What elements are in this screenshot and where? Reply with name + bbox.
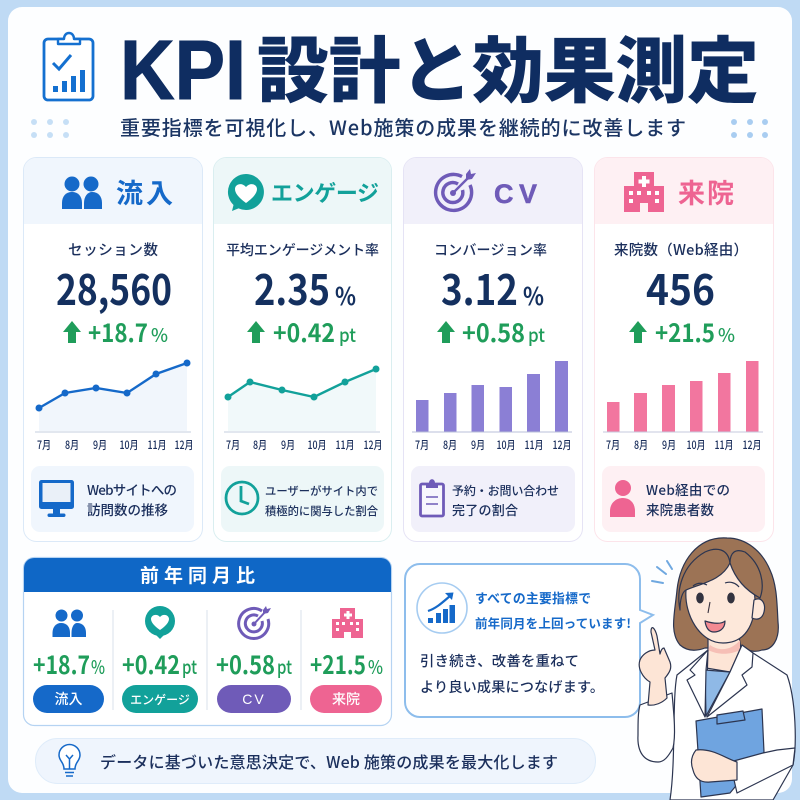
callout: speech bubble <box>405 564 653 717</box>
line chart: 11月 <box>148 437 166 453</box>
metric label: セッション数 <box>68 239 158 260</box>
metric value: 3.12 <box>441 257 518 318</box>
change: pt <box>339 321 356 348</box>
column: エンゲージ: pt <box>182 653 197 680</box>
emphasis marks <box>652 561 672 583</box>
column: エンゲージ: +0.42 <box>122 646 180 682</box>
description: Webサイトへの <box>87 479 177 499</box>
bar chart: 7月 <box>415 437 429 453</box>
change <box>437 314 545 350</box>
eyes <box>696 592 735 604</box>
line chart: 7月 <box>37 437 51 453</box>
bar chart: 8月 <box>443 437 457 453</box>
bangs <box>679 549 730 610</box>
icon: light bulb <box>59 744 80 776</box>
illustration: doctor pointing <box>638 538 795 800</box>
description <box>221 466 384 532</box>
column: エンゲージ <box>122 606 198 713</box>
icon: hospital <box>624 172 664 212</box>
change: % <box>151 321 168 348</box>
description <box>31 466 194 532</box>
footer message bar: データに基づいた意思決定で、Web 施策の成果を最大化します <box>100 749 558 773</box>
icon: clipboard with check and bars <box>44 33 93 100</box>
metric value: % <box>523 277 544 312</box>
icon: target <box>436 169 476 210</box>
icon: clock <box>226 482 258 514</box>
column: 来院 <box>310 608 383 713</box>
line chart: 12月 <box>364 437 382 453</box>
change <box>247 314 356 350</box>
description: Web経由での <box>646 479 730 499</box>
description: 訪問数の推移 <box>87 499 168 519</box>
raised hand <box>639 628 671 705</box>
column: エンゲージ: エンゲージ <box>130 691 190 708</box>
panel: エンゲージ <box>214 158 392 542</box>
bar chart: 11月 <box>524 437 544 453</box>
panel: 前年同月比 <box>24 558 392 726</box>
holding arm sleeve <box>730 748 795 793</box>
callout body: 引き続き、改善を重ねて <box>420 650 579 671</box>
decorative dots left <box>31 119 69 138</box>
bar chart: 9月 <box>662 437 676 453</box>
line chart: 12月 <box>174 437 194 453</box>
column: CV: CV <box>242 691 266 707</box>
heading: エンゲージ <box>271 176 379 208</box>
line chart: 11月 <box>336 437 354 453</box>
metric label: コンバージョン率 <box>434 240 547 260</box>
change: +0.42 <box>273 314 335 350</box>
lapels <box>687 650 708 717</box>
heading: CV <box>494 179 537 209</box>
hair <box>674 538 778 651</box>
callout headline <box>475 588 631 632</box>
line chart: 8月 <box>253 437 267 453</box>
metric label: 来院数（Web経由） <box>614 239 748 260</box>
bar chart: 10月 <box>496 437 516 453</box>
change: +0.58 <box>462 314 525 350</box>
line chart: 8月 <box>65 437 79 453</box>
metric value: % <box>335 277 356 312</box>
heading: 来院 <box>678 172 734 211</box>
column: 流入: % <box>91 653 105 680</box>
footer message bar <box>36 738 596 784</box>
callout body: より良い成果につなげます。 <box>420 677 604 697</box>
column: CV: pt <box>277 653 292 680</box>
description: 積極的に関与した割合 <box>265 503 379 519</box>
callout headline: 前年同月を上回っています! <box>475 613 631 632</box>
column: CV <box>216 606 292 713</box>
description: 完了の割合 <box>452 500 518 519</box>
line chart: 9月 <box>93 437 107 453</box>
callout headline: すべての主要指標で <box>475 588 591 607</box>
holding hand <box>692 750 737 782</box>
callout body <box>420 650 604 697</box>
panel: 来院 <box>594 158 774 542</box>
heading: 流入 <box>116 172 173 211</box>
coat <box>670 645 795 800</box>
description: 予約・お問い合わせ <box>452 482 559 499</box>
description: 来院患者数 <box>646 499 714 519</box>
bar chart <box>603 361 763 453</box>
change: +21.5 <box>655 314 715 350</box>
column: CV: +0.58 <box>216 646 275 682</box>
icon: heart bubble small <box>145 606 175 639</box>
bar chart: 8月 <box>634 437 648 453</box>
bar chart: 12月 <box>552 437 572 453</box>
title: 設計と効果測定 <box>257 12 759 118</box>
description <box>411 466 575 532</box>
line chart: 9月 <box>281 437 295 453</box>
column: 流入: 流入 <box>54 689 82 709</box>
description: ユーザーがサイト内で <box>265 483 378 499</box>
panel heading: 前年同月比 <box>140 561 255 588</box>
metric label: 平均エンゲージメント率 <box>226 240 379 260</box>
line chart <box>35 360 194 453</box>
column: 来院: 来院 <box>332 689 360 709</box>
icon: heart bubble <box>228 174 264 211</box>
bar chart: 9月 <box>471 437 485 453</box>
panel: 流入 <box>24 158 202 542</box>
mouth <box>705 621 725 632</box>
line chart: 10月 <box>120 437 138 453</box>
bar chart: 12月 <box>742 437 762 453</box>
metric value: 28,560 <box>56 257 172 318</box>
line chart <box>224 366 382 453</box>
icon: clipboard <box>420 479 444 516</box>
icon: growth chart <box>417 583 467 633</box>
icon: target small <box>239 606 271 638</box>
icon: people <box>62 176 102 209</box>
column: 来院: +21.5 <box>310 646 366 682</box>
raised arm sleeve <box>638 693 675 762</box>
change <box>63 314 168 350</box>
description <box>602 466 765 532</box>
decorative dots right <box>731 119 768 138</box>
subtitle: 重要指標を可視化し、Web施策の成果を継続的に改善します <box>120 112 686 141</box>
clipboard <box>696 709 764 797</box>
change: % <box>718 321 735 348</box>
bar chart: 7月 <box>606 437 620 453</box>
column: 来院: % <box>368 653 383 680</box>
column: 流入: +18.7 <box>33 646 90 682</box>
nose <box>708 602 710 613</box>
title: KPI <box>120 23 246 117</box>
change: +18.7 <box>88 314 148 350</box>
bar chart: 10月 <box>686 437 706 453</box>
face <box>686 563 755 643</box>
change <box>629 314 735 350</box>
change: pt <box>528 321 545 348</box>
panel: CV <box>404 158 582 542</box>
line chart: 7月 <box>226 437 240 453</box>
ear <box>752 599 765 619</box>
icon: hospital small <box>332 608 363 638</box>
icon: monitor <box>39 480 74 517</box>
panel heading <box>24 558 391 592</box>
neck <box>706 636 741 672</box>
shirt <box>705 670 730 716</box>
line chart: 10月 <box>308 437 326 453</box>
icon: patient <box>610 480 635 517</box>
metric value: 456 <box>646 257 715 318</box>
metric value: 2.35 <box>254 257 330 318</box>
bar chart <box>412 361 572 453</box>
icon: people small <box>52 610 86 637</box>
bar chart: 11月 <box>714 437 734 453</box>
column: 流入 <box>33 610 105 713</box>
